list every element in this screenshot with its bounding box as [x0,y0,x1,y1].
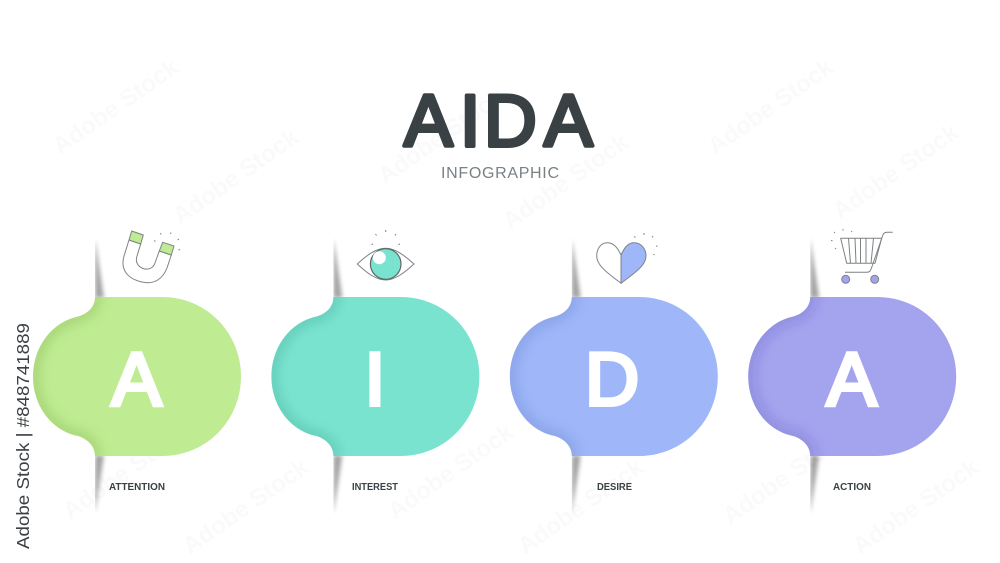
watermarks: Adobe Stock [168,123,304,230]
letter: D [585,337,639,421]
icon: heart [597,233,658,283]
watermarks: Adobe Stock [703,53,839,160]
inner shadow [748,290,810,462]
divider shadow [572,238,581,514]
inner shadow [33,290,95,462]
subtitle: INFOGRAPHIC [441,165,559,182]
divider shadow [95,238,104,514]
watermarks: Adobe Stock [373,83,509,190]
shape [271,297,479,456]
letter: A [111,337,162,421]
label: ATTENTION [109,482,165,493]
watermarks: Adobe Stock [58,418,194,525]
panel: interest [271,238,479,514]
panel: desire [510,238,718,514]
inner shadow [510,290,572,462]
watermarks: Adobe Stock [48,53,184,160]
letter: I [364,337,385,421]
divider shadow [810,238,819,514]
label: INTEREST [352,482,398,493]
label: ACTION [833,482,871,493]
divider shadow [333,238,342,514]
watermarks: Adobe Stock [718,423,854,530]
watermarks: Adobe Stock [848,453,984,560]
shape [748,297,956,456]
label: DESIRE [597,482,632,493]
letter: A [827,337,877,421]
shape [33,297,241,456]
shape [510,297,718,456]
title: AIDA [404,81,593,162]
icon: eye [357,230,414,280]
watermarks: Adobe Stock [498,128,634,235]
stock id text: Adobe Stock | #848741889 [13,323,33,549]
watermarks: Adobe Stock [178,453,314,560]
panel: attention [33,231,241,514]
panel: action [748,238,956,514]
icon: magnet [123,231,180,283]
watermarks: Adobe Stock [383,418,519,525]
watermarks: Adobe Stock [828,118,964,225]
inner shadow [271,290,333,462]
icon: shopping cart [831,229,893,283]
watermarks: Adobe Stock [513,453,649,560]
